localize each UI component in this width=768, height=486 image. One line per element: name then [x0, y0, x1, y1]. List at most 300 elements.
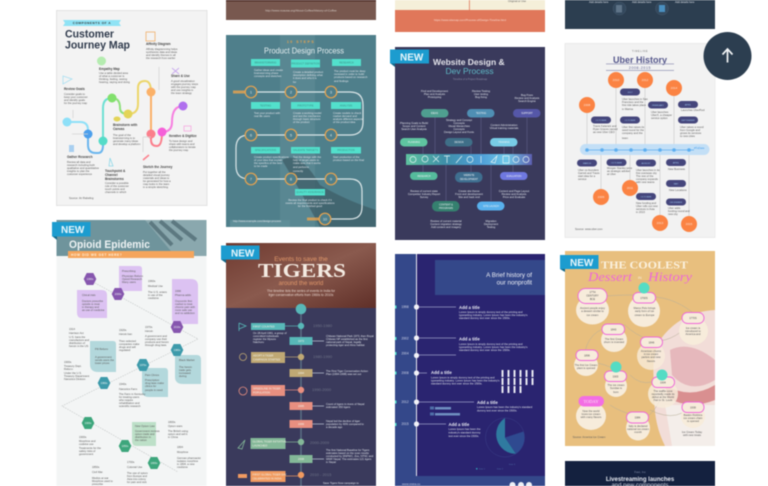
- event text: A government: [95, 355, 112, 359]
- step descriptions: market demand and: [333, 114, 357, 118]
- event text: distribution in: [135, 435, 151, 439]
- phase descriptions: Review Testing: [472, 89, 491, 93]
- phase descriptions: Content and Page Layout: [499, 189, 529, 193]
- bubble text: [573, 306, 703, 439]
- phase descriptions: Find and Development: [421, 89, 448, 93]
- step labels and descriptions: Channel: [105, 173, 118, 177]
- event text: medicine: [177, 465, 188, 469]
- event text: Under the U.S.: [64, 371, 82, 375]
- bubble text: The first Ice Cream: [575, 363, 598, 367]
- era ranges: [310, 323, 333, 477]
- phase descriptions: Site and back end: [458, 195, 480, 199]
- phase pills above band: [400, 109, 540, 146]
- year box labels: 1994: [298, 371, 305, 375]
- purple callouts: [77, 266, 198, 324]
- event text: New Opium Law: [135, 424, 155, 428]
- card: partial orange poster footer: https://www.sitemap.com/Process-of/Design-Timeline.html: [434, 18, 506, 22]
- phase descriptions: Strategy and Concept: [446, 118, 472, 122]
- era title text: CAMPAIGN STARTED: [253, 358, 280, 362]
- timeline band: #ToDate: [694, 146, 705, 150]
- step label text: PRODUCTION: [337, 148, 355, 152]
- green callout: [132, 422, 156, 446]
- bubble text: month: [634, 430, 642, 434]
- event descriptions: with new teams: [636, 180, 655, 184]
- event text: products and heroin: [145, 340, 169, 344]
- step descriptions: Create a detailed product: [293, 70, 323, 74]
- step labels and descriptions: touch points and: [105, 187, 125, 191]
- event text: On 28 April 1961, a group of: [253, 331, 287, 335]
- pill labels: DESIGN: [454, 141, 464, 144]
- step descriptions: reviewed in order to build: [334, 72, 365, 76]
- timeline axis: [416, 254, 418, 476]
- date labels: 1984: [635, 416, 641, 420]
- entry body text: text ever since the 1500s.: [448, 434, 479, 438]
- date labels: 1843: [611, 328, 617, 332]
- step labels and descriptions: Sketch the Journey: [143, 165, 173, 169]
- event descriptions: seed round for the: [622, 128, 644, 132]
- header photo: [226, 243, 376, 308]
- heading: 10 STEPS: [287, 40, 315, 44]
- phase descriptions: User testing: [474, 92, 489, 96]
- event text: Prescription: [145, 378, 160, 382]
- event text: Civil War: [92, 470, 103, 474]
- turquoise icons: [610, 282, 668, 380]
- green year hexagons: [82, 417, 160, 469]
- card: partial orange poster footer: [395, 0, 545, 32]
- card: Livestreaming launches (cropped): Fast, Inc: [634, 470, 646, 474]
- month labels: OCTOBER: [611, 162, 622, 164]
- phase descriptions: Content migration strategy: [430, 222, 462, 226]
- event descriptions: new city: [668, 212, 678, 216]
- step labels and descriptions: insights to plan the: [67, 169, 90, 173]
- pill labels: PROGRAMS: [439, 207, 453, 210]
- step descriptions: Create models to check: [333, 111, 362, 115]
- step descriptions: The product must be deep: [334, 69, 366, 73]
- teal callouts: [90, 341, 201, 397]
- event text: distribution of: [69, 341, 85, 345]
- timeline band: [580, 144, 710, 155]
- event text: drugs and sell: [119, 345, 136, 349]
- title block: our nonprofit: [497, 280, 532, 286]
- heading: History: [647, 270, 693, 284]
- event descriptions: Morgan Stanley joins: [607, 166, 633, 170]
- phase descriptions: Concepts: [453, 121, 465, 125]
- step labels and descriptions: in a simple sketching: [143, 185, 168, 189]
- entry titles: Add a title: [431, 370, 452, 375]
- step labels and descriptions: and identify themes in all: [146, 53, 176, 57]
- step labels and descriptions: generate many ideas: [113, 139, 139, 143]
- bubble text: plant is opened: [577, 366, 596, 370]
- month labels: MARCH: [583, 162, 591, 165]
- hexagon labels: 1960s: [101, 382, 108, 385]
- year labels: 1998: [402, 305, 409, 309]
- event text: national park of Nepal, legally: [326, 340, 362, 344]
- heading: [587, 260, 693, 284]
- event descriptions: as strategic adviser: [607, 169, 630, 173]
- bubble text: churn is invented: [604, 340, 625, 344]
- event descriptions: service: [578, 177, 587, 181]
- bubble text: born: [613, 390, 619, 394]
- title: Opioid Epidemic: [69, 239, 150, 251]
- journey stops: [62, 88, 188, 146]
- year box labels: [298, 339, 305, 461]
- entry body text: standard dummy text ever since the 1500s.: [431, 382, 483, 386]
- event text: chronic pain with: [175, 305, 196, 309]
- step labels and descriptions: detailed visual journey: [143, 173, 170, 177]
- step labels and descriptions: Brainstorms: [105, 177, 124, 181]
- step descriptions: description defining what: [293, 73, 323, 77]
- event text: U.S. bans the: [69, 335, 86, 339]
- pill labels: CONTENT &: [439, 204, 453, 206]
- entry titles: Add a title: [459, 305, 480, 310]
- step labels and descriptions: Gather Research: [67, 155, 93, 159]
- bubble text: with many flavors: [581, 415, 602, 419]
- card: A Brief history of our nonprofit: [395, 254, 545, 486]
- era icons: [238, 323, 247, 478]
- entry body text: typesetting industry. Lorem Ipsum has been the industry's: [431, 378, 500, 382]
- card: partial navy poster footer: Add details here: [589, 0, 609, 4]
- event text: Chitwan NP established as the first: [326, 337, 368, 341]
- heading: Website Design &: [433, 57, 505, 67]
- card: Livestreaming launches (cropped): Livestreaming launches: [606, 477, 675, 483]
- event descriptions: Francisco and the: [622, 100, 644, 104]
- bubble text: Ancient people enjoy: [580, 306, 606, 310]
- step descriptions: of the product: [293, 120, 310, 124]
- event text: drug laws make: [145, 381, 164, 385]
- chart legend: Item 2: [497, 468, 504, 470]
- event text: conducted by DNPWC, Zoo, NTNC and: [326, 454, 374, 458]
- event text: Physician Reform: [122, 274, 144, 278]
- step labels and descriptions: Empathy Map: [99, 67, 120, 71]
- bubble text: with new treats: [683, 433, 702, 437]
- heading: Dev Process: [446, 66, 494, 76]
- card: Website Design & Dev Process: [395, 47, 545, 240]
- hexagon labels: 1800s: [151, 462, 158, 465]
- entry body text: standard dummy text ever since the 1500s.: [459, 316, 511, 320]
- event text: Oxycontin first: [175, 299, 192, 303]
- bubble text: debut at the World: [652, 395, 674, 399]
- phase descriptions: Front end development: [455, 192, 483, 196]
- event bubbles: [574, 295, 708, 440]
- step numbers: 9: [330, 178, 332, 182]
- date labels: 1939: [690, 406, 696, 410]
- step descriptions: brainstorming phase: [254, 71, 279, 75]
- vertical stems: [587, 80, 689, 224]
- phase descriptions: Bug fixing: [475, 95, 487, 99]
- footer: www.vistra.co: [402, 482, 421, 486]
- chevron markers: [233, 90, 319, 220]
- year labels: 2015: [402, 422, 409, 426]
- step labels and descriptions: for the journey map: [64, 101, 88, 105]
- pill labels: IDEAS: [431, 112, 438, 115]
- event text: in therapy and: [82, 305, 100, 309]
- title block: A Brief history of: [486, 272, 532, 279]
- event text: rehabilitation and: [119, 401, 140, 405]
- card: Customer Journey Map: [56, 10, 207, 206]
- card: partial coffee poster footer: http://www.ncausa.org/About-Coffee/History-of-Coffee: [265, 8, 337, 12]
- event text: Morphine: [177, 450, 189, 454]
- year labels: 2013: [657, 221, 664, 225]
- step descriptions: correctly: [293, 169, 304, 173]
- bubble text: The waffle cone: [654, 389, 673, 393]
- step numbers: 8: [290, 178, 292, 182]
- step labels and descriptions: and use insights in: [171, 88, 194, 92]
- step labels and descriptions: To have design and: [169, 139, 193, 143]
- step descriptions: and performs: [293, 165, 309, 169]
- step numbers: 2: [290, 90, 292, 94]
- bubble text: Ice cream is: [686, 326, 701, 330]
- date labels: BCE: [590, 297, 595, 301]
- badge: NEW (Opioid): NEW: [61, 225, 85, 236]
- event text: who require: [119, 398, 134, 402]
- event text: The use of opium: [127, 471, 149, 475]
- phase descriptions: Prototyping: [428, 95, 442, 99]
- event text: protecting tiger and rhino habitat: [326, 343, 365, 347]
- card: Livestreaming launches (cropped): [565, 461, 715, 486]
- card: Uber History: [565, 44, 715, 238]
- event text: safety risks of: [79, 449, 96, 453]
- step descriptions: to be made: [254, 164, 268, 168]
- phase descriptions: Scope and Content: [402, 124, 426, 128]
- month labels: DECEMBER: [670, 202, 683, 204]
- event text: The Farm in Kentucky: [119, 392, 146, 396]
- title: Journey Map: [65, 40, 130, 52]
- event text: 1850s: [92, 465, 100, 469]
- step labels and descriptions: research including both: [67, 163, 95, 167]
- connector stems: [72, 67, 159, 152]
- month labels: OCTOBER: [641, 196, 652, 198]
- event text: The British using: [168, 429, 189, 433]
- process icon band: [406, 154, 532, 165]
- event text: Heroin: [145, 329, 153, 333]
- step labels and descriptions: customer experience: [67, 172, 92, 176]
- pill labels: WEBSITE: [464, 174, 475, 177]
- heading: THE COOLEST: [601, 260, 688, 272]
- top node: [296, 304, 306, 314]
- year labels: 2015: [686, 222, 693, 226]
- year labels: 2011: [627, 186, 634, 190]
- event text: [253, 331, 374, 485]
- event text: trade gets: [179, 368, 192, 372]
- month labels: MAY: [674, 182, 679, 186]
- bubble text: a dessert similar to: [581, 309, 604, 313]
- step label text: PROTOTYPE: [298, 104, 314, 108]
- step descriptions: make sure that it works: [293, 161, 321, 165]
- entry body text: dummy text ever since the 1500s.: [477, 408, 517, 412]
- vertical axis: [300, 308, 302, 486]
- title: [65, 28, 130, 52]
- event text: opioids to treat: [82, 302, 100, 306]
- heading: [264, 40, 344, 56]
- step numbers: 3: [330, 90, 332, 94]
- step labels and descriptions: Affinity Diagram: [146, 42, 171, 46]
- year labels: [402, 305, 409, 426]
- badge: NEW (Website): NEW: [400, 52, 424, 64]
- heading: [258, 256, 346, 297]
- icons: [63, 32, 191, 166]
- year labels: [584, 78, 693, 226]
- step descriptions: Start production of the: [333, 155, 360, 159]
- event text: in Nepal: [326, 460, 336, 464]
- teal year ticks: [395, 306, 396, 426]
- event descriptions: Uber co-founders: [578, 168, 599, 172]
- year labels: 2002: [402, 336, 409, 340]
- month labels: [583, 92, 695, 204]
- month labels: OCTOBER: [625, 120, 636, 122]
- badge: NEW (Tigers): [221, 246, 260, 263]
- event text: Pharma adds: [175, 293, 192, 297]
- event text: for treating users: [119, 395, 140, 399]
- event text: increased: [179, 371, 191, 375]
- connectors: [285, 326, 324, 476]
- step labels and descriptions: materials and ideas to: [143, 176, 170, 180]
- step descriptions: http://www.example.com/design-process: [233, 219, 282, 223]
- card: partial navy poster footer: Add details here: [632, 0, 652, 4]
- step numbers: [250, 90, 332, 222]
- phase descriptions: Search Engine: [518, 99, 536, 103]
- step descriptions: the specifics of the item: [254, 161, 283, 165]
- event text: a decade ago: [326, 425, 343, 429]
- era ranges: 2000-2009: [310, 440, 330, 445]
- event text: Heroin ban: [119, 332, 133, 336]
- bubble text: ice cream chain: [684, 416, 703, 420]
- step numbers: 10: [323, 218, 327, 222]
- phase descriptions: Review and Analysis: [502, 192, 527, 196]
- event text: Reform: [64, 367, 74, 371]
- step label text: RESEARCH: [339, 60, 354, 64]
- event descriptions: Uber launches: [651, 110, 669, 114]
- event descriptions: Ryan Graves named: [593, 127, 618, 131]
- entry body text: typesetting industry. Lorem Ipsum has been the industry's: [459, 345, 528, 349]
- step labels and descriptions: A good visualization: [171, 79, 195, 83]
- event text: Prescribing: [122, 269, 136, 273]
- event descriptions: start idea for a: [578, 174, 596, 178]
- event descriptions: company and the: [622, 131, 643, 135]
- event text: Black Market: [179, 358, 195, 362]
- event text: 1914: [69, 327, 75, 331]
- event text: heroin in the US: [69, 344, 88, 348]
- step labels and descriptions: Brainstorm with: [113, 123, 137, 127]
- event descriptions: Uber launches in San: [622, 97, 648, 101]
- bubble text: introduced to: [685, 329, 701, 333]
- step descriptions: and findings: [334, 79, 349, 83]
- month labels: AUGUST: [641, 162, 651, 165]
- bubble text: The ice cream: [607, 383, 625, 387]
- step descriptions: analyze different aspects: [333, 117, 363, 121]
- era ranges: 1980-1990: [313, 354, 333, 359]
- event text: [64, 269, 201, 486]
- year nodes: [414, 304, 419, 427]
- era ranges: 2010 - 2015: [310, 472, 332, 477]
- event descriptions: Uber first raises its: [622, 125, 645, 129]
- step descriptions: meets all requirements and specifications: [285, 201, 335, 205]
- phase descriptions: Testing: [487, 225, 496, 229]
- vertical connectors: [423, 117, 527, 201]
- step labels and descriptions: hearing, saying and doing: [99, 80, 130, 84]
- heading: Timeline of a Project Roadmap: [453, 78, 488, 81]
- subtitle bar: HOW DID WE GET HERE?: [71, 253, 122, 257]
- event text: population by 40% compared to: [326, 422, 364, 426]
- event text: company use their: [145, 337, 167, 341]
- step descriptions: products based on research: [334, 75, 368, 79]
- heading: 2008-2015: [629, 66, 651, 70]
- purple year hexagons: [84, 273, 183, 333]
- phase descriptions: Virtual training materials: [490, 126, 519, 130]
- event text: through drug laws: [145, 343, 167, 347]
- step descriptions: for the finished good: [298, 204, 323, 208]
- event descriptions: Source: www.uber.com: [575, 227, 603, 231]
- phase descriptions: Create site theme: [458, 189, 480, 193]
- event text: opium trade and: [135, 432, 155, 436]
- step labels and descriptions: Review Goals: [64, 87, 85, 91]
- bubble text: Source: America Ice Cream: [573, 435, 606, 439]
- event text: Narcotics Farm: [119, 387, 138, 391]
- event descriptions: funding round and: [668, 209, 690, 213]
- event text: prescribe: [92, 482, 104, 486]
- event descriptions: New Business: [668, 167, 686, 171]
- event descriptions: Uber raises a round: [680, 125, 704, 129]
- step labels and descriptions: channels in which: [105, 190, 127, 194]
- event text: Pain Clinics: [145, 373, 160, 377]
- era title text: SPEEDLINE IN TIGER: [253, 386, 280, 390]
- phase descriptions: Add content and imagery: [431, 225, 462, 229]
- event text: codeine use: [79, 442, 94, 446]
- event text: lower prices: [95, 361, 110, 365]
- event descriptions: Travis Kalanick and: [593, 124, 617, 128]
- event descriptions: company expands: [636, 177, 658, 181]
- pill labels: PLANNING: [408, 141, 420, 144]
- phase descriptions: Review and Analysis: [515, 96, 540, 100]
- entry body text: industry's standard dummy: [448, 430, 481, 434]
- event descriptions: services in Asia: [636, 207, 655, 211]
- phase pills below band: [410, 172, 528, 212]
- heading: IN: [638, 276, 642, 280]
- entry titles: Add a title: [477, 400, 498, 405]
- hexagon labels: 1850s: [122, 445, 129, 448]
- phase descriptions: Planning Goals to Build: [400, 121, 428, 125]
- bubble text: The first Cream: [605, 337, 624, 341]
- event text: 1700s: [127, 460, 135, 464]
- hexagon labels: 2010s: [174, 326, 181, 329]
- event text: in 1804, a new: [177, 462, 195, 466]
- step labels and descriptions: and develop a platform: [113, 142, 141, 146]
- heading: Uber History: [613, 55, 667, 65]
- step labels and descriptions: The goal of the: [113, 133, 131, 137]
- process path: [236, 92, 363, 219]
- heading: [606, 50, 674, 71]
- event text: estimated 350 tigers: [326, 405, 351, 409]
- entry body text: typesetting industry. Lorem Ipsum has been the industry's: [459, 313, 528, 317]
- bubble text: loves ice cream: [582, 412, 601, 416]
- event descriptions: The rest of the: [636, 174, 654, 178]
- step descriptions: concepts and sketches: [254, 74, 282, 78]
- event text: 1970s: [145, 325, 153, 329]
- event descriptions: Uber launches in its: [636, 168, 660, 172]
- step descriptions: [233, 68, 368, 223]
- event descriptions: [575, 97, 705, 231]
- era title text: ADOPT A TIGER: [253, 354, 273, 358]
- phase descriptions: Content Administration: [490, 123, 518, 127]
- date pills: [576, 288, 704, 423]
- entry body text: Lorem Ipsum is simply dummy text of the printing and: [431, 376, 495, 380]
- month labels: JULY: [627, 92, 633, 94]
- step numbers: 6: [250, 134, 252, 138]
- event text: 1920s: [119, 328, 127, 332]
- step label text: PRODUCT DEFINITION: [291, 62, 320, 66]
- step labels and descriptions: Affinity diagramming helps: [146, 47, 178, 51]
- event descriptions: at Uber: [607, 172, 616, 176]
- subtitle bar: [68, 251, 194, 258]
